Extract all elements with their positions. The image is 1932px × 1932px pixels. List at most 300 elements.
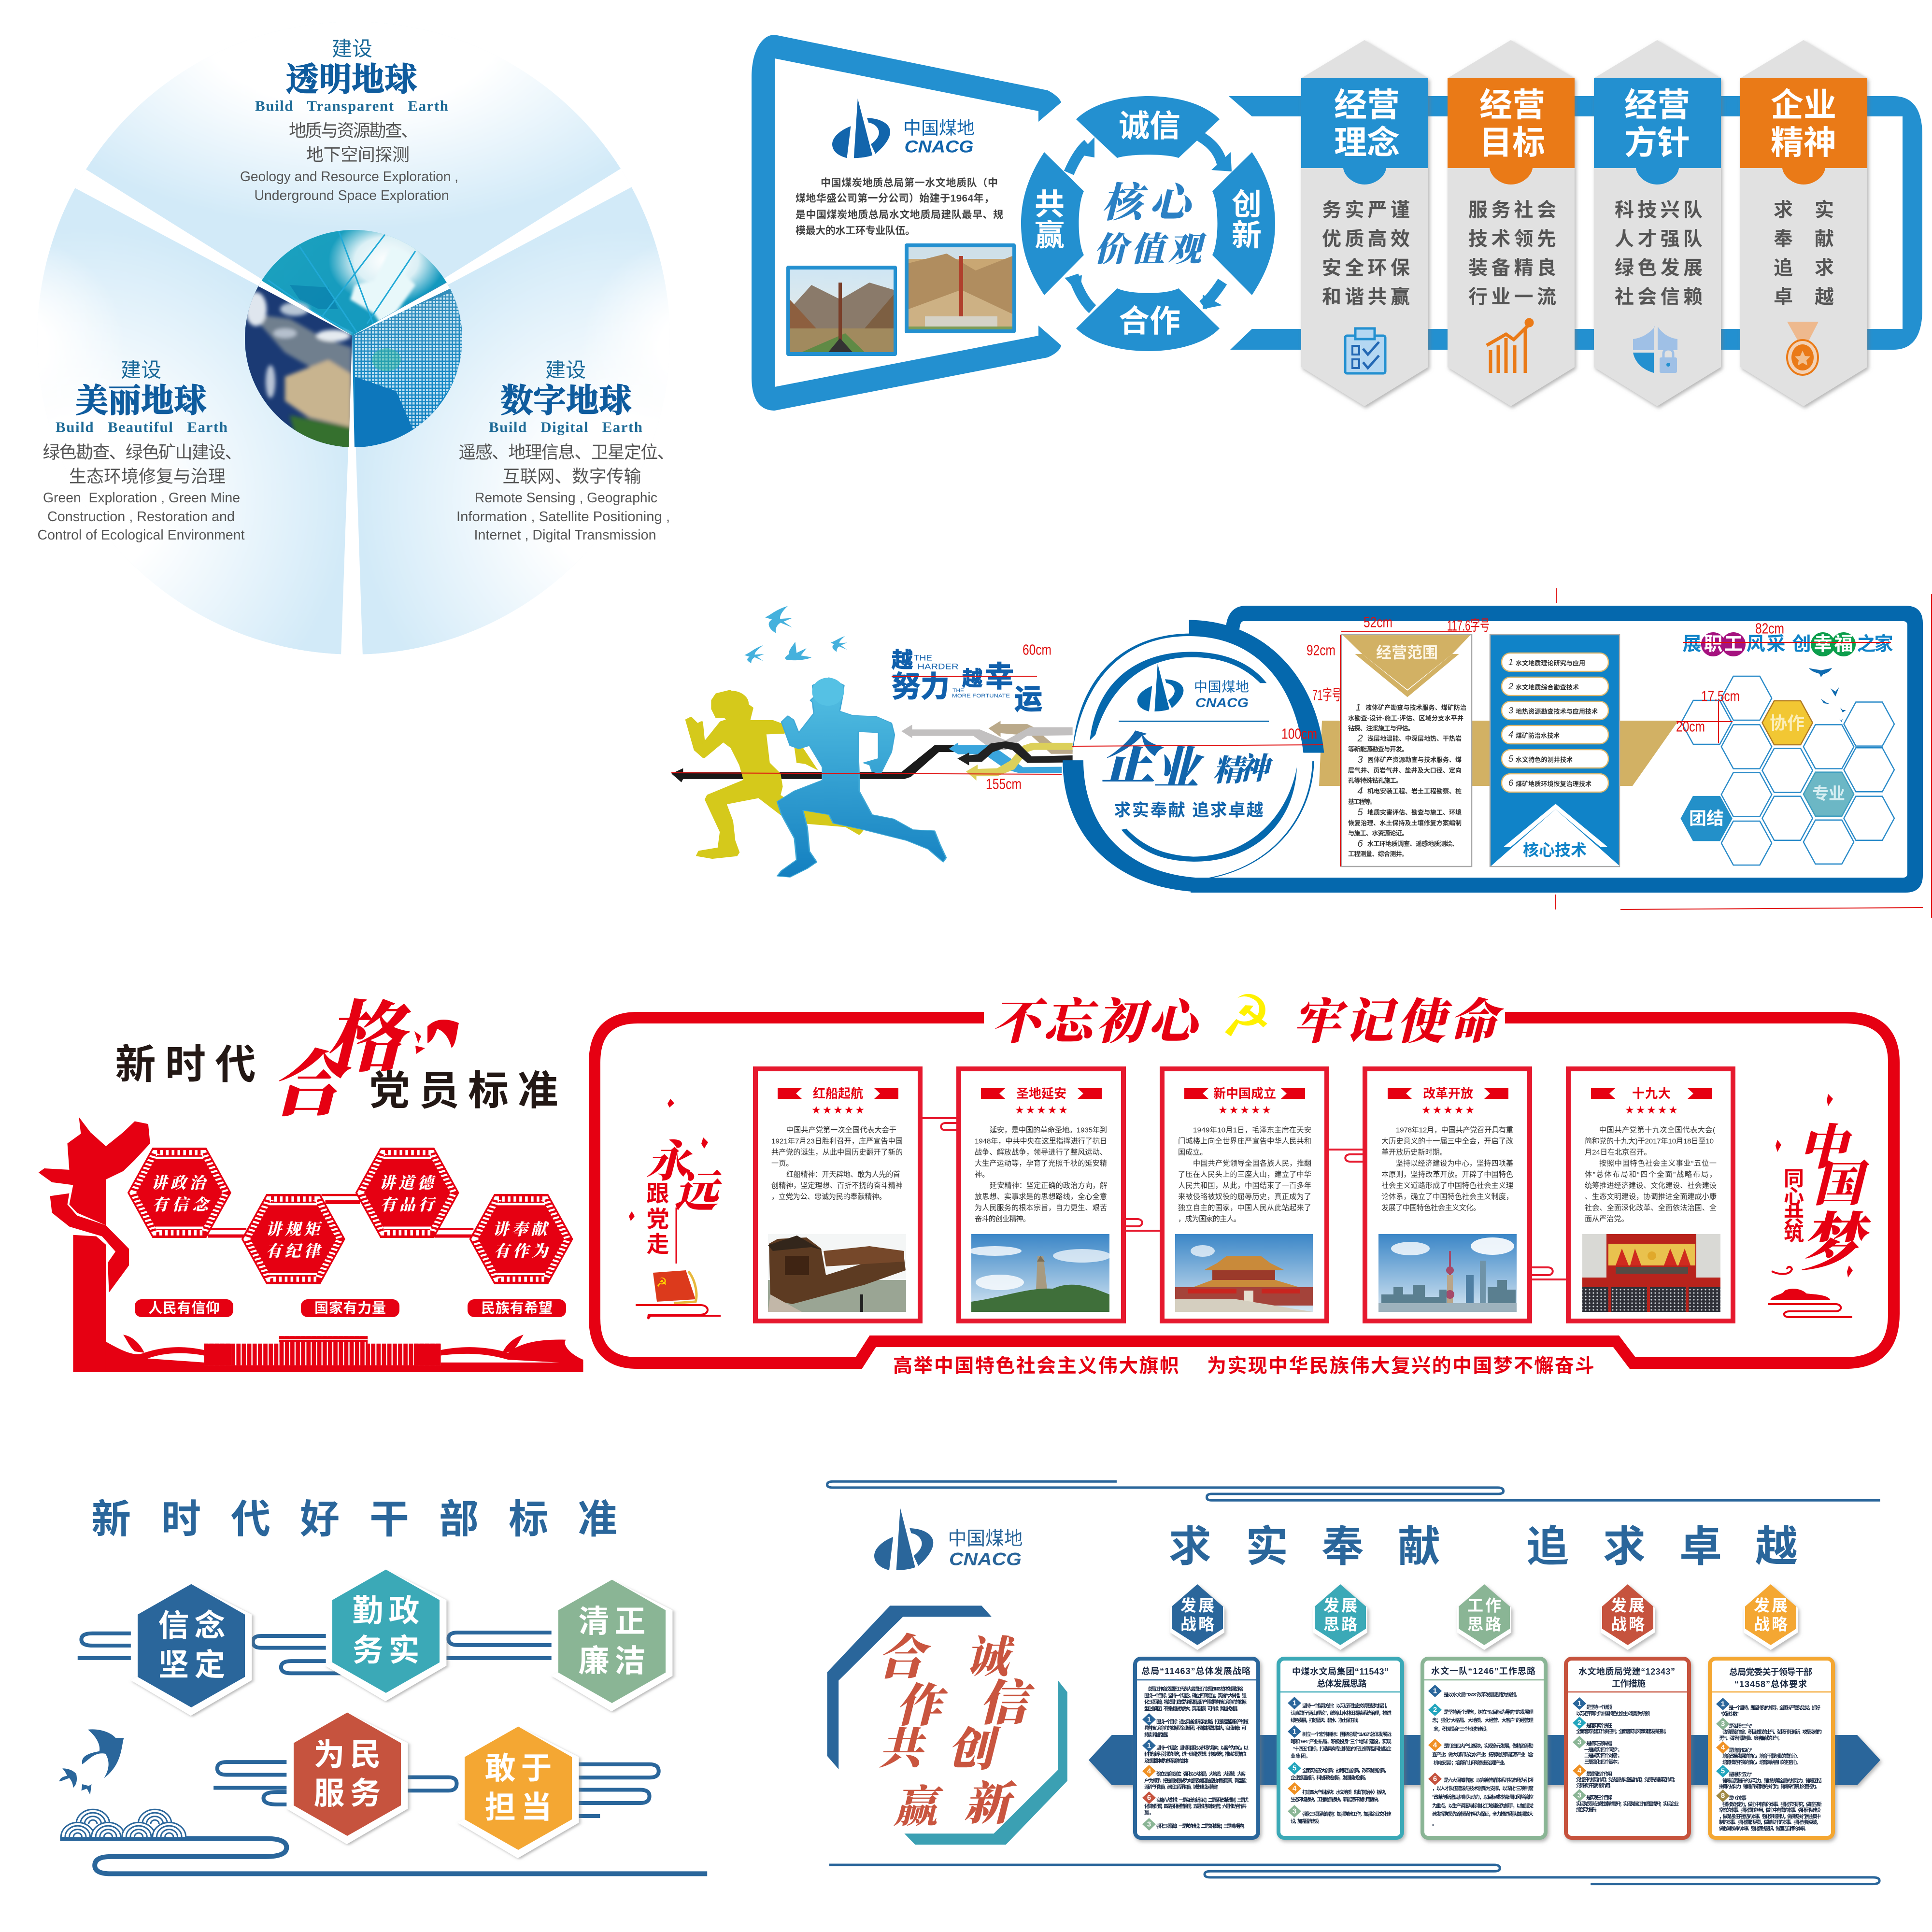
card: geology bureau party building 12343: 实现党员队伍党性素养提升；实现党建工作质量提升；实现企业 — [1576, 1801, 1679, 1807]
text: beautiful earth: Build Beautiful Earth — [56, 418, 227, 436]
hexagon: politics and belief: 讲政治 — [151, 1171, 210, 1193]
number badges — [1428, 1685, 1442, 1785]
heading: pragmatic dedication pursuit of excellence: 求 — [1603, 1522, 1646, 1571]
scope list: 浅层地温能、中深层地热、干热岩 — [1367, 735, 1462, 742]
photo: Tiananmen — [1175, 1234, 1313, 1312]
slogan: the harder the more fortunate: THE — [914, 653, 932, 663]
number badges — [1142, 1713, 1156, 1831]
card: sacred Yanan: 延安，是中国的革命圣地。1935年到 — [990, 1125, 1107, 1134]
card: bureau 11463 strategy: 强化三项保障：一是党的建设；二是文化凝聚；三是机制导向。 — [1156, 1823, 1248, 1829]
company intro text — [796, 177, 1003, 237]
honeycomb labels: 团结 — [1689, 809, 1724, 828]
pill: people have faith: 人民有信仰 — [148, 1300, 220, 1316]
card: team one 1246: 水文一队“1246”工作思路 — [1431, 1666, 1535, 1676]
red dimension annotations: 17.5cm — [1701, 688, 1740, 704]
gold band — [1319, 721, 1678, 786]
column: business target: 行业一流 — [1468, 286, 1556, 308]
card connectors — [923, 1118, 1566, 1279]
text: transparent earth: Geology and Resource Exploration , — [240, 169, 458, 185]
scope list: 液体矿产勘查与技术服务、煤矿防治 — [1365, 704, 1466, 711]
column: business policy: 科技兴队 — [1615, 199, 1703, 221]
scope list: 与施工、水资源论证。 — [1348, 830, 1408, 837]
card: bureau 11463 strategy — [1135, 1659, 1258, 1838]
slogan: forever follow the party: 远 — [674, 1156, 722, 1219]
hexagon: rules and discipline: 讲规矩 — [266, 1217, 323, 1239]
small hex labels: 战略 — [1611, 1615, 1645, 1634]
technology list: 水文地质理论研究与应用 — [1516, 660, 1585, 667]
card: reform and opening: ★★★★★ — [1421, 1104, 1475, 1117]
card: party committee 13458: “关键少数” — [1721, 1711, 1739, 1717]
card: reform and opening: 大历史意义的十一届三中全会，开启了改 — [1381, 1137, 1513, 1146]
heading: do not forget original aspiration: 不忘初心 — [992, 983, 1208, 1052]
heading: pragmatic dedication pursuit of excellence: 卓 — [1679, 1522, 1722, 1571]
text: digital earth: 互联网、数字传输 — [502, 467, 641, 486]
heading: staff style happy home: 幸 — [1813, 634, 1833, 655]
column: business policy: 经营 — [1624, 87, 1690, 124]
emblem: enterprise spirit ring: 求实奉献 追求卓越 — [1114, 801, 1264, 820]
card: new China: 门城楼上向全世界庄严宣告中华人民共和 — [1178, 1137, 1311, 1146]
card: water bureau group 11543: “十四五”目标，打造具有专业特色的行业领军型科技型企 — [1293, 1746, 1392, 1752]
card: team one 1246: 。 — [1432, 1821, 1437, 1827]
text: transparent earth — [240, 38, 458, 203]
text: digital earth: Remote Sensing , Geographic — [475, 490, 657, 506]
emblem: enterprise spirit ring — [1063, 620, 1324, 892]
card: party committee 13458: 培育改革发展的信心、 培育干事创业的责任心、 — [1722, 1753, 1801, 1759]
column: business target — [1448, 40, 1575, 406]
card: bureau 11463 strategy: 实施六大举措：一是突出创新驱动；二是深化改革改制；三是优 — [1156, 1797, 1249, 1803]
column: business philosophy: 优质高效 — [1322, 228, 1410, 250]
petal labels: 合作 — [1119, 304, 1180, 339]
card: 19th congress: 面从严治党。 — [1585, 1215, 1629, 1223]
petal labels: 新 — [1232, 219, 1262, 252]
scope list: 地质灾害评估、勘查与施工、环境 — [1367, 809, 1462, 816]
card: sacred Yanan — [959, 1069, 1123, 1321]
hexagon: honest and clean: 清正 — [579, 1604, 645, 1639]
icon: clipboard — [1345, 328, 1385, 373]
hexagon: politics and belief — [128, 1148, 231, 1238]
text: digital earth — [456, 358, 674, 543]
heading: qualified (calligraphy): 格 — [325, 976, 412, 1087]
small hex labels: 发展 — [1754, 1597, 1788, 1614]
logo: CNACG: 中国煤地 — [948, 1528, 1023, 1549]
card: water bureau group 11543: 强化三项保障措施：加强党建工作，加强企业文化建 — [1302, 1811, 1392, 1817]
card: party committee 13458: 总局党委关于领导干部 — [1729, 1667, 1812, 1677]
card: reform and opening: 革开放历史新时期。 — [1381, 1149, 1447, 1156]
heading: 准 — [578, 1497, 617, 1542]
scope list: 5 — [1357, 807, 1363, 818]
bottom slogan: 高举中国特色社会主义伟大旗帜 — [893, 1355, 1179, 1377]
heading: staff style happy home: 职 — [1704, 634, 1723, 655]
card: party committee 13458 — [1710, 1659, 1833, 1838]
number badges: 3 — [1577, 1738, 1581, 1747]
card: sacred Yanan: 放思想、实事求是的思想路线，全心全意 — [975, 1192, 1107, 1201]
card: team one 1246: 查产业；做大煤矿防治水产业；拓展地热新能源产业（含 — [1432, 1751, 1534, 1758]
card: geology bureau party building 12343 — [1566, 1659, 1689, 1838]
heading: 好 — [300, 1497, 340, 1542]
hexagon: morality and conduct: 有品行 — [380, 1192, 437, 1215]
slogan: China dream: 同 — [1784, 1167, 1804, 1190]
card: geology bureau party building 12343: 综合实力提升。 — [1576, 1806, 1600, 1813]
number badges: 4 — [1147, 1767, 1151, 1776]
card: red boat: ★★★★★ — [811, 1104, 865, 1117]
number badges: 1 — [1293, 1699, 1296, 1707]
red dimension annotations — [671, 588, 1932, 918]
panel: core technology: 核心技术 — [1523, 841, 1587, 859]
column: business target: 装备精良 — [1468, 257, 1556, 279]
slogan: the harder the more fortunate: 越 — [892, 648, 913, 672]
card: bureau 11463 strategy: 化三项保障，将总局打造成为新型能源矿产领域具有核心竞争力的资源 — [1144, 1699, 1247, 1705]
card: water bureau group 11543: 树立一个宏伟目标：围绕总局“11463”总体发展战 — [1302, 1731, 1392, 1737]
black arrow — [671, 745, 954, 782]
card: water bureau group 11543: 绿色发展，打好蓝天、碧水、净土保卫战。 — [1291, 1717, 1362, 1723]
heading: staff style happy home: 风 — [1746, 634, 1765, 655]
emblem: enterprise spirit ring: 神 — [1239, 745, 1273, 787]
slogan: the harder the more fortunate: THE — [952, 688, 964, 694]
card: bureau 11463 strategy: 化资源配置；四是强化经营管理；五是推进资本运营；六是推动合作共 — [1144, 1803, 1247, 1809]
number badges: 2 — [1433, 1706, 1437, 1714]
hexagon: morality and conduct: 讲道德 — [379, 1171, 436, 1193]
number badges: 3 — [1293, 1807, 1296, 1815]
card: bureau 11463 strategy: 围绕一个目标，坚持一个理念，确立“四商”定位，实施六大举措，强 — [1144, 1692, 1247, 1699]
octagon: values: 诚 — [965, 1622, 1017, 1685]
text: transparent earth: 地下空间探测 — [306, 145, 410, 164]
card: party committee 13458: 是弘扬“三气” — [1729, 1723, 1752, 1729]
hexagon: honest and clean — [552, 1580, 672, 1711]
wave arcs — [61, 1809, 186, 1837]
card: water bureau group 11543: 打造四大产业板块：水文地质（煤矿防治水）板块， — [1302, 1789, 1389, 1795]
number badges: 8 — [1721, 1792, 1725, 1800]
scope list: 2 — [1357, 733, 1363, 744]
small hex labels: 思路 — [1467, 1615, 1501, 1634]
text: transparent earth: Underground Space Exploration — [254, 188, 449, 203]
slogan: China dream: 共 — [1784, 1204, 1804, 1227]
heading: staff style happy home: 展 — [1682, 634, 1702, 655]
small hex labels: 战略 — [1180, 1615, 1214, 1634]
card: geology bureau party building 12343: 是落实两个责任 — [1586, 1722, 1612, 1729]
number badges: 1 — [1433, 1687, 1437, 1695]
card: party committee 13458: 制的本事、强化履职尽责，做抓实干的本事、强化创新突破， — [1719, 1819, 1821, 1825]
card: team one 1246: 建发挥党员先锋模范作用为保证，全力推进我队做强做大 — [1432, 1811, 1534, 1817]
card: water bureau group 11543: 略和“6+1”产业布局，积极投身“三个地球”建设，实现 — [1291, 1738, 1392, 1745]
card: new China: 人民共和国，从此，中国结束了一百多年 — [1178, 1181, 1311, 1190]
card: geology bureau party building 12343: 党员领导干部引领作用。 — [1576, 1782, 1614, 1789]
card: sacred Yanan: 战争、解放战争，领导进行了整风运动、 — [975, 1148, 1107, 1156]
card: 19th congress: 统筹推进经济建设、文化建设、社会建设 — [1585, 1181, 1717, 1190]
scope list: 水工环地质调查、遥感地质测绘、 — [1367, 840, 1458, 847]
octagon: values: 信 — [979, 1664, 1035, 1734]
pill: nation has strength — [301, 1299, 399, 1317]
card: geology bureau party building 12343: 二是做实“四个对接”， — [1584, 1752, 1622, 1759]
icon: party flag with clouds: ☭ — [656, 1276, 668, 1290]
decorative lines — [827, 1481, 1880, 1884]
red dimension annotations: 60cm — [1023, 641, 1051, 658]
text: digital earth: 数字地球 — [500, 383, 632, 419]
card: party committee 13458: 拼搏的战斗力、锤炼抓铁落地的执行力、锤炼令行禁止的管控力。 — [1719, 1783, 1820, 1790]
card: party committee 13458: 是八个本事 — [1729, 1795, 1747, 1801]
hexagon: serve the people: 服务 — [314, 1776, 381, 1811]
hexagon: dare to take responsibility — [458, 1727, 579, 1858]
scope list: 层气井、页岩气井、盐井及大口径、定向 — [1348, 767, 1462, 774]
card: geology bureau party building 12343: 以习近平新时代中国特色社会主义思想为统领 — [1576, 1710, 1650, 1717]
card: water bureau group 11543: 中煤水文局集团“11543” — [1292, 1666, 1389, 1676]
heading: staff style happy home: 家 — [1874, 634, 1893, 655]
wheel background sectors — [0, 0, 727, 667]
pill: nation has hope: 民族有希望 — [481, 1300, 553, 1316]
number badges: 4 — [1577, 1767, 1582, 1775]
honeycomb labels — [1689, 713, 1845, 828]
huabiao column and base skyline — [39, 1117, 583, 1372]
hexagon: rules and discipline: 有纪律 — [266, 1238, 322, 1262]
heading: qualified (calligraphy): 合 — [270, 1026, 352, 1130]
number badges: 4 — [1433, 1741, 1437, 1749]
card: sacred Yanan: ★★★★★ — [1015, 1104, 1068, 1117]
card: party committee 13458: 做敢闯敢试的本事、强化底线意识，做廉洁自律的本事。 — [1719, 1825, 1809, 1832]
red dimension annotations: 100cm — [1281, 725, 1317, 742]
card: sacred Yanan: 奋斗的创业精神。 — [975, 1215, 1030, 1223]
hexagon: politics and belief: 有信念 — [152, 1192, 211, 1215]
text: digital earth: Build Digital Earth — [489, 418, 642, 436]
small hex labels: 思路 — [1323, 1615, 1357, 1634]
column: enterprise spirit: 企业 — [1771, 87, 1836, 124]
card: water bureau group 11543: 业集团。 — [1291, 1753, 1311, 1759]
card: geology bureau party building 12343: 工作措施 — [1612, 1679, 1646, 1689]
card: reform and opening — [1365, 1069, 1530, 1321]
main frame — [1191, 606, 1923, 893]
technology list: 3 — [1508, 706, 1513, 715]
icon: growth chart — [1487, 320, 1532, 373]
scope list: 基工程等。 — [1348, 798, 1376, 806]
globe with three segments — [237, 217, 473, 483]
card: 19th congress: 十九大 — [1632, 1086, 1671, 1101]
text: beautiful earth: 生态环境修复与治理 — [69, 467, 226, 486]
heading: party member standard: 党员标准 — [369, 1068, 558, 1113]
center title: core values — [1094, 170, 1207, 271]
photo: congress hall — [1582, 1234, 1720, 1312]
card: team one 1246: 念；强化“大格局、大地质、大经营、大客户”的经营理 — [1432, 1717, 1534, 1723]
technology list: 1 — [1508, 657, 1513, 667]
heading — [91, 1497, 617, 1542]
number badges: 4 — [1293, 1784, 1297, 1793]
octagon: values: 作 — [895, 1669, 948, 1735]
text: transparent earth: 透明地球 — [286, 61, 417, 98]
column: business policy: 方针 — [1624, 125, 1690, 161]
scope list: 机电安装工程、岩土工程勘察、桩 — [1367, 787, 1462, 795]
slogan: the harder the more fortunate: 运 — [1014, 684, 1042, 715]
petal labels: 创 — [1232, 188, 1262, 221]
cycle arrows — [1069, 136, 1222, 309]
scope list: 固体矿产资源勘查与技术服务、煤 — [1367, 756, 1462, 763]
card: party committee 13458: 常态的本事、强化责任担当，做心中有责的本事、强化团队建设 — [1719, 1807, 1821, 1813]
heading: staff style happy home: 采 — [1766, 634, 1786, 655]
card: water bureau group 11543 — [1279, 1659, 1402, 1838]
column: enterprise spirit: 求 — [1815, 257, 1834, 279]
heading: pragmatic dedication pursuit of excellence: 求 — [1169, 1522, 1211, 1571]
hexagon: firm belief: 坚定 — [158, 1648, 225, 1682]
scope list: 6 — [1357, 838, 1363, 849]
card: 19th congress — [1568, 1069, 1733, 1321]
red dimension annotations: 92cm — [1307, 641, 1335, 659]
pill: nation has strength: 国家有力量 — [314, 1300, 386, 1316]
card: 19th congress: ★★★★★ — [1625, 1104, 1678, 1117]
hexagon: honest and clean: 廉洁 — [579, 1644, 645, 1678]
card: new China: 新中国成立 — [1213, 1086, 1276, 1101]
panel: core values wall — [752, 35, 1922, 411]
heading: keep mission in mind: 牢记使命 — [1293, 983, 1504, 1052]
heading: 干 — [369, 1497, 409, 1542]
card: new China: 来被侵略被奴役的屈辱历史，真正成为了 — [1178, 1192, 1311, 1201]
card: bureau 11463 strategy: 赢。 — [1144, 1809, 1154, 1816]
card: party committee 13458: 培育模范不贪的慎心、 培育海纳百川的包容心。 — [1722, 1759, 1801, 1765]
text: digital earth: Information , Satellite Positioning , — [456, 509, 670, 525]
column: business policy: 绿色发展 — [1615, 257, 1703, 279]
heading: 部 — [439, 1497, 479, 1542]
card: new China: 独立自主的国家，中国人民从此站起来了 — [1178, 1204, 1311, 1212]
text: beautiful earth: Control of Ecological Environment — [38, 527, 244, 543]
hexagon: firm belief — [131, 1584, 252, 1716]
scope list: 钻探、注浆施工与评估。 — [1348, 724, 1414, 732]
text: beautiful earth: Green Exploration , Green Mine — [43, 490, 240, 506]
card: 19th congress: 月24日在北京召开。 — [1585, 1149, 1651, 1156]
card: new China — [1162, 1069, 1327, 1321]
octagon: values: 赢 — [894, 1772, 944, 1834]
slogan: China dream — [1784, 1108, 1871, 1283]
column: business target: 技术领先 — [1468, 228, 1556, 250]
technology list: 水文地质综合勘查技术 — [1516, 684, 1579, 691]
small hex labels: 战略 — [1754, 1615, 1788, 1634]
slogan: the harder the more fortunate: MORE FORTUNATE — [952, 693, 1010, 699]
heading: pragmatic dedication pursuit of excellence: 追 — [1526, 1522, 1569, 1571]
card: red boat: 一页。 — [771, 1159, 793, 1168]
icon: shield with lock — [1633, 327, 1677, 373]
card: geology bureau party building 12343: 是坚持一个统领 — [1586, 1704, 1612, 1710]
panel: good cadre standard — [59, 1497, 707, 1874]
card: sacred Yanan: 圣地延安 — [1016, 1086, 1066, 1101]
card: reform and opening: 改革开放 — [1423, 1086, 1473, 1101]
slogan: China dream: 国 — [1814, 1145, 1870, 1215]
honeycomb — [1681, 676, 1894, 865]
slogan: the harder the more fortunate — [892, 648, 1042, 715]
card: reform and opening: 1978年12月，中国共产党召开具有重 — [1396, 1126, 1513, 1134]
octagon: values: 合 — [877, 1619, 931, 1688]
small hex labels: 工作 — [1467, 1597, 1501, 1614]
heading: 新 — [91, 1497, 131, 1542]
hexagon: serve the people: 为民 — [314, 1737, 381, 1772]
photo: red boat — [768, 1234, 906, 1312]
photo: Yanan pagoda — [968, 1234, 1111, 1312]
card: reform and opening: 本原则，坚持改革开放。开辟了中国特色 — [1381, 1171, 1513, 1179]
panel: qualified party member standard — [39, 976, 583, 1372]
card: sacred Yanan: 为人民服务的根本宗旨，自力更生、艰苦 — [975, 1204, 1107, 1212]
card: water bureau group 11543: 全面实施五大创新：战略定位创新，改革发展创新， — [1302, 1767, 1389, 1774]
company intro text: 煤地华盛公司第一分公司）始建于1964年， — [796, 193, 994, 204]
number badges: 1 — [1147, 1716, 1151, 1723]
company intro frame — [752, 35, 1061, 411]
heading: qualified (calligraphy) — [270, 976, 459, 1130]
card: team one 1246: 是以水文局“1343”改革发展思路为统领。 — [1444, 1691, 1520, 1698]
emblem: enterprise spirit ring: 业 — [1153, 732, 1205, 798]
heading: pragmatic dedication pursuit of excellence — [1169, 1522, 1798, 1571]
icon: clouds — [1768, 1094, 1853, 1317]
column: business philosophy: 经营 — [1334, 87, 1400, 124]
heading: staff style happy home: 创 — [1792, 634, 1811, 655]
column: business target: 经营 — [1479, 87, 1545, 124]
text: transparent earth: 地质与资源勘查、 — [289, 121, 418, 140]
company intro text: 模最大的水工环专业队伍。 — [796, 225, 915, 237]
card: water bureau group 11543: 设，加强品牌建设。 — [1291, 1818, 1322, 1824]
heading: new era: 新时代 — [115, 1042, 256, 1087]
column: enterprise spirit: 精神 — [1771, 125, 1836, 161]
number badges: 1 — [1293, 1727, 1296, 1736]
card: team one 1246: 为重点，以生产调度与标准化工地建设为抓手，以加强党 — [1432, 1803, 1534, 1809]
petal labels: 共 — [1035, 188, 1065, 221]
card: team one 1246: 是坚持两个理念，树立“以目标为导向”的发展理 — [1444, 1709, 1534, 1715]
heading: staff style happy home: 工 — [1724, 634, 1743, 655]
panel: business scope: 经营范围 — [1376, 644, 1438, 661]
slogan: forever follow the party: 跟 — [646, 1180, 669, 1207]
card: team one 1246: 是六大保障措施：以完善营销体系开拓市场为引领 — [1444, 1777, 1534, 1783]
card: party committee 13458: 锤炼自我提升的学习力、锤炼统筹全局的领导力、锤炼团结 — [1722, 1777, 1822, 1784]
small hex labels: 发展 — [1611, 1597, 1645, 1614]
heading: pragmatic dedication pursuit of excellence: 奉 — [1321, 1522, 1364, 1571]
card: bureau 11463 strategy: 持续、跨越式发展。 — [1144, 1732, 1171, 1738]
heading: 标 — [509, 1497, 548, 1542]
petal labels: 赢 — [1035, 219, 1065, 252]
hexagon: dare to take responsibility: 敢于 — [485, 1751, 552, 1786]
column: enterprise spirit: 越 — [1815, 286, 1834, 308]
card: reform and opening: 论体系，确立了中国特色社会主义制度， — [1381, 1193, 1513, 1201]
card: geology bureau party building 12343: 是抓实三项举措 — [1586, 1740, 1612, 1747]
logo: CNACG: CNACG — [904, 137, 974, 156]
red frame — [595, 1018, 1894, 1363]
octagon: values: 共 — [879, 1713, 926, 1776]
card: sacred Yanan: 神。 — [975, 1171, 989, 1179]
column: enterprise spirit — [1740, 40, 1867, 406]
card: 19th congress: 简称党的十九大)于2017年10月18日至10 — [1585, 1137, 1714, 1146]
technology list: 煤矿防治水技术 — [1516, 732, 1560, 739]
honeycomb labels: 专业 — [1812, 785, 1845, 803]
column: business philosophy: 理念 — [1334, 125, 1400, 161]
red dimension annotations: 82cm — [1755, 620, 1784, 637]
card: red boat: ，立党为公、忠诚为民的奉献精神。 — [771, 1192, 886, 1201]
card: team one 1246: ”改革创新激励机制为动力，以目标成本管理和风险管控 — [1432, 1794, 1534, 1800]
number badges: 6 — [1433, 1775, 1437, 1783]
card: geology bureau party building 12343: 党组织的领导作用；党支部战斗堡垒作用；党员先锋模范作用； — [1576, 1776, 1678, 1783]
hexagon: morality and conduct — [355, 1148, 459, 1238]
column: enterprise spirit: 追 — [1774, 257, 1793, 279]
card: water bureau group 11543: 坚持一个指导方针：以习近平生态文明思想为指引， — [1302, 1703, 1390, 1709]
card: reform and opening: 坚持以经济建设为中心，坚持四项基 — [1396, 1159, 1513, 1168]
card: 19th congress: 体”总体布局和“四个全面”战略布局， — [1585, 1170, 1717, 1179]
panel: runners and slogan — [671, 588, 1932, 918]
card: team one 1246: 是打造四大产业板块，实现多元发展，做精资源勘 — [1444, 1743, 1534, 1749]
card: party committee 13458: 是培育“四心” — [1729, 1747, 1752, 1753]
hexagon: diligent and practical — [326, 1570, 446, 1701]
card: red boat: 共产党的诞生，从此中国历史翻开了新的 — [771, 1149, 903, 1156]
number badges: 1 — [1147, 1742, 1151, 1749]
card: new China: 1949年10月1日，毛泽东主席在天安 — [1193, 1126, 1311, 1134]
petal labels — [1035, 109, 1262, 339]
company intro text: 中国煤炭地质总局第一水文地质队（中 — [821, 177, 998, 188]
column: enterprise spirit: 奉 — [1774, 228, 1793, 250]
column: business policy — [1594, 40, 1721, 406]
card: bureau 11463 strategy: 型企业集团，不断做强做优做大，实现健康、可持续、跨越式发展。 — [1144, 1705, 1241, 1712]
slogan: China dream: 梦 — [1800, 1192, 1871, 1283]
red dimension annotations: 71字号 — [1312, 687, 1341, 703]
card: bureau 11463 strategy: 确立“四商”定位：强化以“大格局、大地质、大经营、大客 — [1156, 1771, 1246, 1777]
panel: core technology — [1490, 635, 1619, 867]
text: beautiful earth: 建设 — [121, 358, 161, 382]
cloud line decoration — [60, 1633, 707, 1874]
